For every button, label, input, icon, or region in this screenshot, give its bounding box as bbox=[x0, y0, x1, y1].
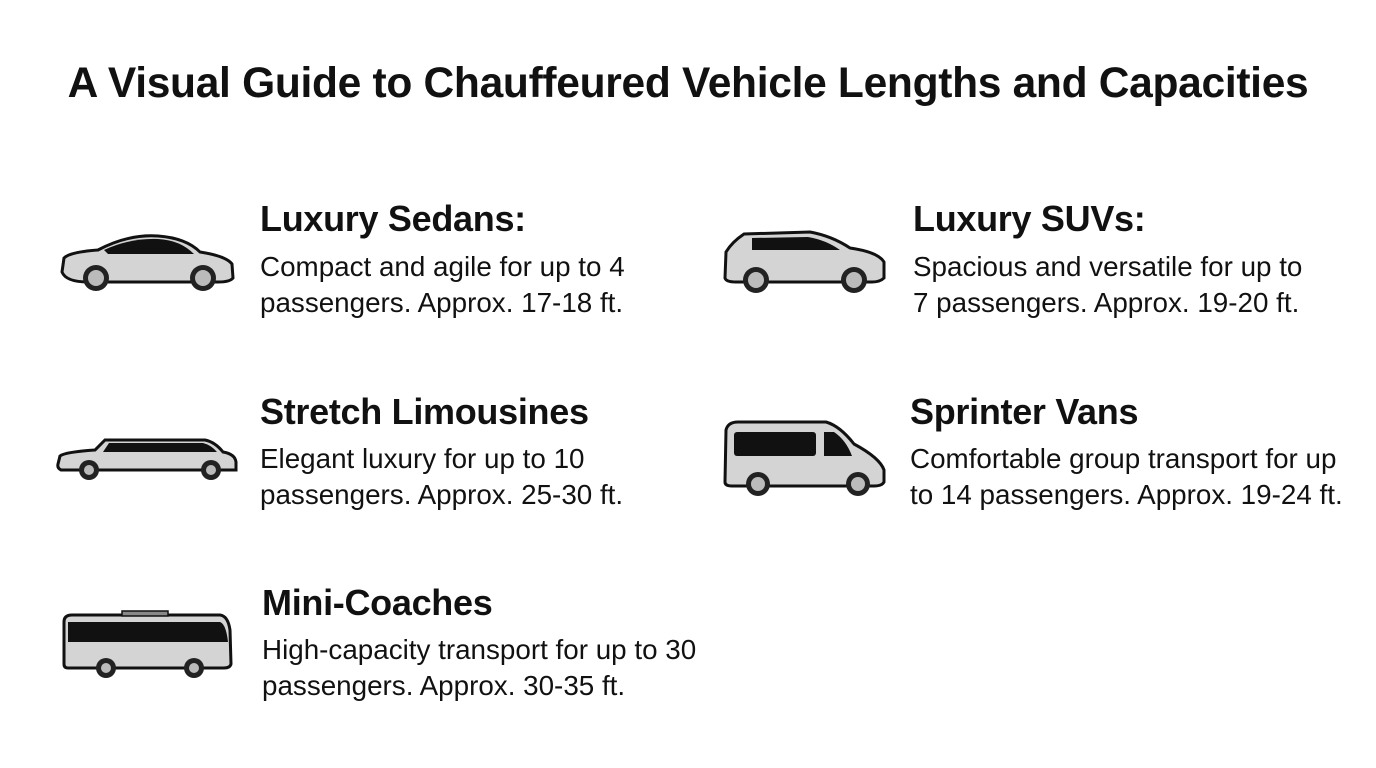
text: sedans bbox=[260, 251, 625, 318]
text: sprinter vans: Comfortable group transport for up bbox=[910, 443, 1336, 474]
text: SUVs: Spacious and versatile for up to bbox=[913, 251, 1302, 282]
heading: Sprinter Vans: Sprinter Vans bbox=[910, 391, 1138, 432]
text: mini-coaches: High-capacity transport for up to 30 bbox=[262, 634, 696, 665]
icon: limousine bbox=[56, 438, 238, 480]
text: sedans: passengers. Approx. 17-18 ft. bbox=[260, 287, 623, 318]
title: A Visual Guide to Chauffeured Vehicle Lengths and Capacities bbox=[68, 60, 1308, 107]
text: sedans: Compact and agile for up to 4 bbox=[260, 251, 625, 282]
text: limousines: Elegant luxury for up to 10 bbox=[260, 443, 584, 474]
text: mini-coaches: passengers. Approx. 30-35 ft. bbox=[262, 670, 625, 701]
icon: SUV bbox=[724, 230, 886, 293]
text: sprinter vans bbox=[910, 443, 1343, 510]
heading: Mini-Coaches: Mini-Coaches bbox=[262, 582, 492, 623]
icon: mini-coach bbox=[62, 610, 232, 678]
text: limousines: passengers. Approx. 25-30 ft. bbox=[260, 479, 623, 510]
text: sprinter vans: to 14 passengers. Approx. 19-24 ft. bbox=[910, 479, 1343, 510]
icon: sedan bbox=[60, 234, 234, 291]
text: SUVs: 7 passengers. Approx. 19-20 ft. bbox=[913, 287, 1299, 318]
heading: Stretch Limousines: Stretch Limousines bbox=[260, 391, 589, 432]
heading: Luxury Sedans: Luxury Sedans: bbox=[260, 198, 526, 239]
heading: Luxury SUVs: Luxury SUVs: bbox=[913, 198, 1145, 239]
icon: sprinter van bbox=[724, 420, 886, 496]
text: mini-coaches bbox=[262, 634, 696, 701]
text: limousines bbox=[260, 443, 623, 510]
text: SUVs bbox=[913, 251, 1302, 318]
